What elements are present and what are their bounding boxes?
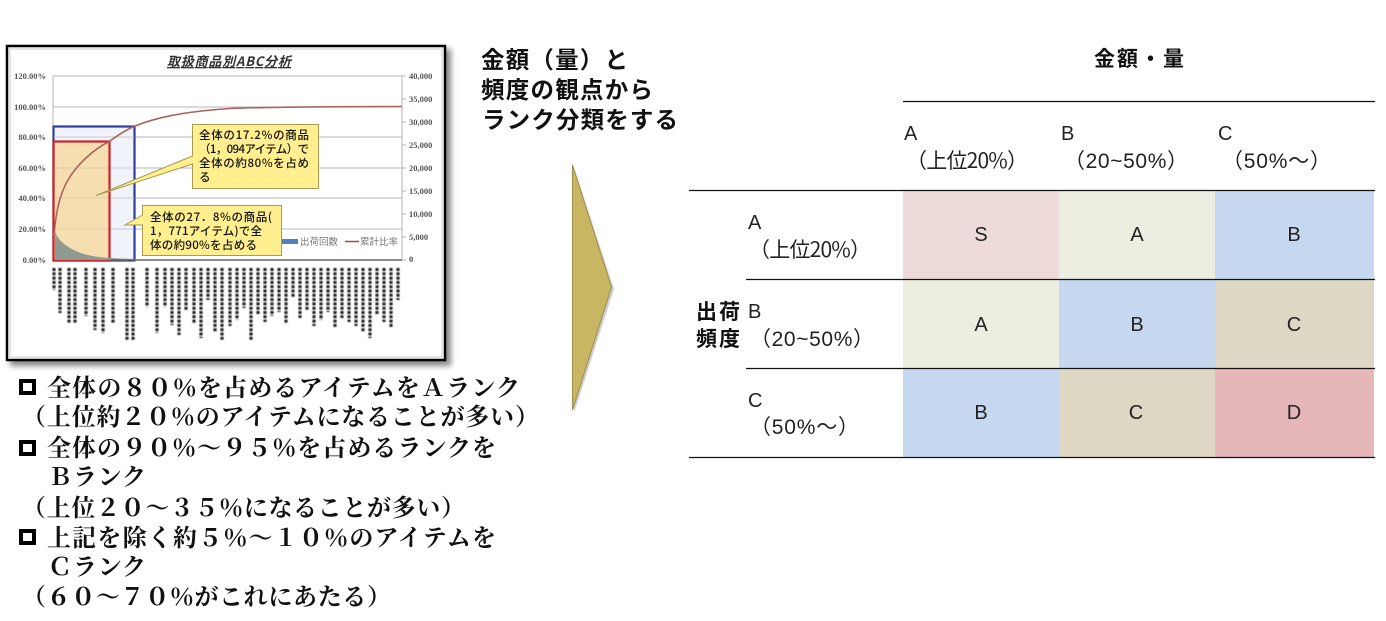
- chart title: 取扱商品別ABC分析: [167, 51, 293, 70]
- cell ranks: S: [974, 224, 988, 246]
- right axis labels: 20,000: [409, 163, 432, 173]
- column labels: （上位20%）: [906, 145, 1028, 175]
- callout: 17.2%: [96, 124, 318, 196]
- row heading: 頻度: [696, 323, 740, 353]
- callout: 17.2%: （1，094アイテム）で: [199, 141, 309, 157]
- text block: rank definitions: （上位２０～３５％になることが多い）: [22, 495, 465, 522]
- column labels: （50%～）: [1222, 150, 1331, 173]
- heading: rank classification: 頻度の観点から: [481, 71, 653, 105]
- row labels: B: [748, 301, 761, 323]
- right axis labels: 5,000: [409, 232, 428, 242]
- text block: rank definitions: Ｂランク: [48, 465, 146, 491]
- bullet: B rank: [21, 442, 34, 454]
- column labels: A: [904, 123, 918, 145]
- callout: 27.8%: 体の約90%を占める: [150, 237, 257, 253]
- right axis labels: 30,000: [409, 117, 432, 127]
- text block: rank definitions: （上位約２０％のアイテムになることが多い）: [22, 404, 539, 431]
- bullet: C rank: [21, 531, 34, 543]
- column labels: [904, 123, 1331, 175]
- red range: 17.2%: [54, 142, 110, 260]
- callout: 27.8%: 全体の27．8%の商品(: [150, 209, 272, 225]
- text block: rank definitions: Ｃランク: [48, 555, 146, 581]
- cell ranks: B: [1287, 224, 1301, 246]
- right axis labels: 10,000: [409, 209, 432, 219]
- row heading: [696, 296, 740, 353]
- cell ranks: D: [1287, 402, 1301, 424]
- text block: rank definitions: 全体の８０％を占めるアイテムをＡランク: [47, 374, 520, 402]
- left axis labels: 0.00%: [23, 255, 46, 265]
- cell ranks: C: [1129, 402, 1143, 424]
- row labels: （20~50%）: [750, 328, 874, 351]
- row labels: A: [748, 212, 762, 234]
- row labels: （50%～）: [750, 416, 859, 439]
- callout: 27.8%: 1，771アイテム)で全: [150, 223, 262, 239]
- text block: rank definitions: 全体の９０％～９５％を占めるランクを: [47, 434, 496, 462]
- cell ranks: A: [1130, 224, 1144, 246]
- cell ranks: B: [974, 402, 988, 424]
- legend: 累計比率: [360, 234, 398, 248]
- left axis labels: 60.00%: [18, 163, 46, 173]
- plot area: [53, 76, 406, 260]
- cumulative ratio curve: [54, 106, 402, 236]
- cell ranks: B: [1130, 314, 1144, 336]
- row heading: 出荷: [696, 296, 740, 326]
- column labels: （20~50%）: [1064, 150, 1188, 173]
- cell ranks: A: [974, 314, 988, 336]
- panel: ABC analysis chart: [7, 46, 451, 366]
- column labels: B: [1061, 123, 1074, 145]
- heading: rank classification: ランク分類をする: [482, 101, 678, 135]
- left axis labels: 80.00%: [18, 132, 46, 142]
- legend: [280, 234, 398, 248]
- callout: 17.2%: 全体の17.2%の商品: [199, 127, 309, 143]
- callout: 17.2%: 全体の約80%を占め: [199, 155, 309, 171]
- text block: rank definitions: [21, 374, 539, 611]
- column heading: 金額・量: [1094, 43, 1184, 73]
- left axis labels: 20.00%: [18, 224, 46, 234]
- category labels: [54, 268, 398, 340]
- column labels: C: [1218, 123, 1232, 145]
- right axis labels: 0: [409, 254, 413, 264]
- right axis labels: [409, 71, 432, 264]
- right axis labels: 40,000: [409, 71, 432, 81]
- cell ranks: [974, 224, 1301, 424]
- left axis labels: 40.00%: [18, 193, 46, 203]
- right axis labels: 35,000: [409, 94, 432, 104]
- cell ranks: C: [1287, 314, 1301, 336]
- left axis labels: 100.00%: [14, 102, 46, 112]
- legend: 出荷回数: [300, 234, 339, 248]
- right axis labels: 25,000: [409, 140, 432, 150]
- left axis labels: 120.00%: [14, 71, 46, 81]
- bullet: A rank: [21, 381, 34, 393]
- matrix cells: [903, 190, 1374, 457]
- text block: rank definitions: （６０～７０％がこれにあたる）: [22, 585, 391, 611]
- left axis labels: [14, 71, 46, 265]
- right axis labels: 15,000: [409, 186, 432, 196]
- shipment count area: [55, 232, 135, 260]
- blue range: 27.8%: [54, 126, 134, 260]
- text block: rank definitions: 上記を除く約５％～１０％のアイテムを: [47, 525, 496, 552]
- heading: rank classification: 金額（量）と: [481, 41, 628, 75]
- callout: 27.8%: [125, 206, 282, 256]
- row labels: [748, 212, 874, 439]
- heading: rank classification: [481, 41, 678, 135]
- rank matrix table: [689, 43, 1375, 458]
- row labels: （上位20%）: [749, 234, 871, 264]
- callout: 17.2%: る: [199, 169, 210, 185]
- arrow: [572, 165, 614, 413]
- row labels: C: [748, 390, 762, 412]
